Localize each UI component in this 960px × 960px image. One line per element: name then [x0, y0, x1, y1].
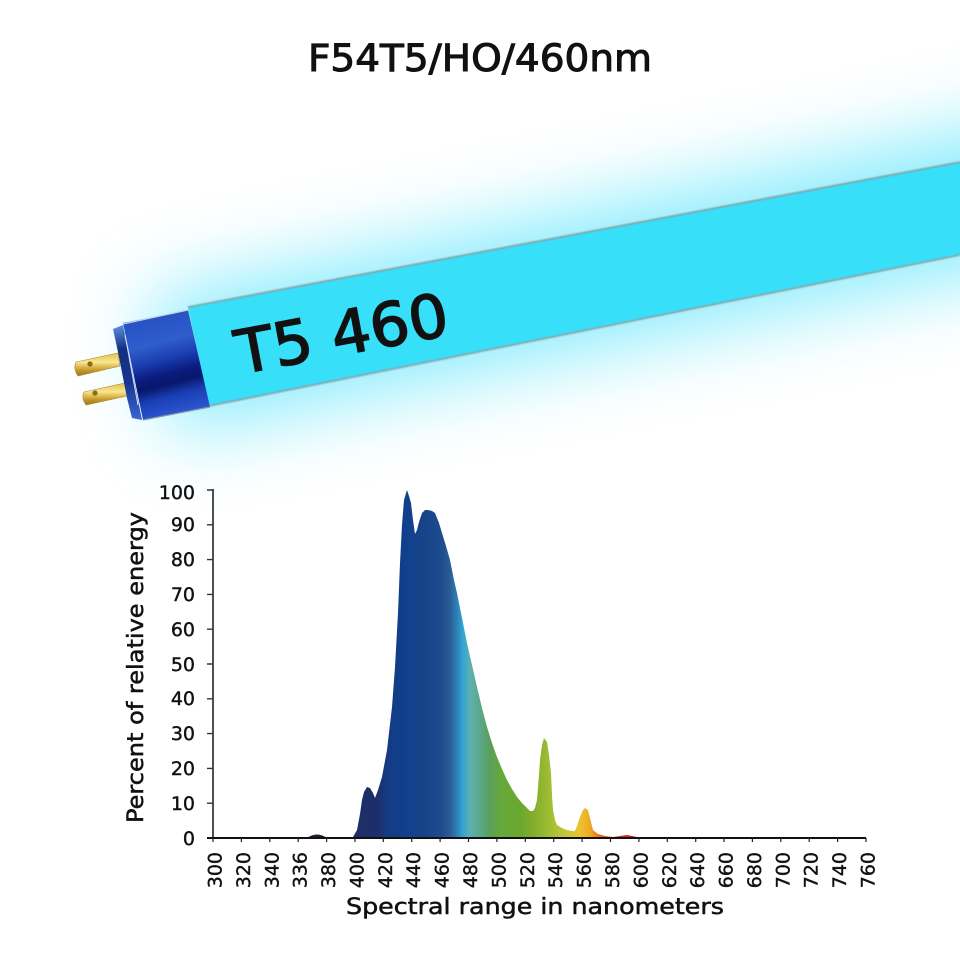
glow around the tube — [150, 88, 960, 432]
UV bump — [307, 834, 327, 838]
y axis title: Percent of relative energy — [124, 512, 149, 823]
x axis numbers: 300 — [204, 852, 226, 888]
x axis numbers: 720 — [801, 852, 823, 888]
x axis numbers: 336 — [290, 852, 312, 888]
y axis numbers: 80 — [171, 549, 195, 571]
x axis numbers: 580 — [602, 852, 624, 888]
icon: blue end cap — [113, 310, 210, 420]
x axis numbers: 480 — [460, 852, 482, 888]
x axis numbers: 620 — [659, 852, 681, 888]
y axis numbers — [159, 482, 195, 850]
x axis numbers — [204, 852, 880, 888]
x axis numbers: 340 — [261, 852, 283, 888]
y axis numbers: 50 — [171, 654, 195, 676]
x axis numbers: 420 — [375, 852, 397, 888]
x axis numbers: 400 — [346, 852, 368, 888]
x axis numbers: 760 — [858, 852, 880, 888]
x axis numbers: 700 — [772, 852, 794, 888]
x axis numbers: 740 — [829, 852, 851, 888]
x axis numbers: 540 — [545, 852, 567, 888]
spectrum chart — [124, 482, 880, 920]
title: F54T5/HO/460nm — [308, 37, 652, 80]
x axis title: Spectral range in nanometers — [346, 895, 724, 920]
y axis numbers: 100 — [159, 482, 195, 504]
y axis numbers: 90 — [171, 514, 195, 536]
x axis numbers: 600 — [630, 852, 652, 888]
y axis numbers: 60 — [171, 619, 195, 641]
y axis numbers: 30 — [171, 723, 195, 745]
x axis numbers: 460 — [432, 852, 454, 888]
axes — [207, 489, 866, 842]
y axis numbers: 20 — [171, 758, 195, 780]
spectral curve — [350, 490, 645, 838]
tube label: T5 460 — [229, 280, 454, 389]
x axis numbers: 560 — [574, 852, 596, 888]
fluorescent tube — [75, 162, 960, 420]
x axis numbers: 640 — [687, 852, 709, 888]
y axis numbers: 10 — [171, 793, 195, 815]
x axis numbers: 440 — [403, 852, 425, 888]
x axis numbers: 520 — [517, 852, 539, 888]
y axis numbers: 0 — [183, 828, 195, 850]
icon: gold pins — [75, 353, 127, 405]
y axis numbers: 70 — [171, 584, 195, 606]
x axis numbers: 500 — [488, 852, 510, 888]
x axis numbers: 320 — [233, 852, 255, 888]
x axis numbers: 380 — [318, 852, 340, 888]
x axis numbers: 660 — [716, 852, 738, 888]
tube body — [188, 162, 960, 406]
x axis numbers: 680 — [744, 852, 766, 888]
y axis numbers: 40 — [171, 688, 195, 710]
